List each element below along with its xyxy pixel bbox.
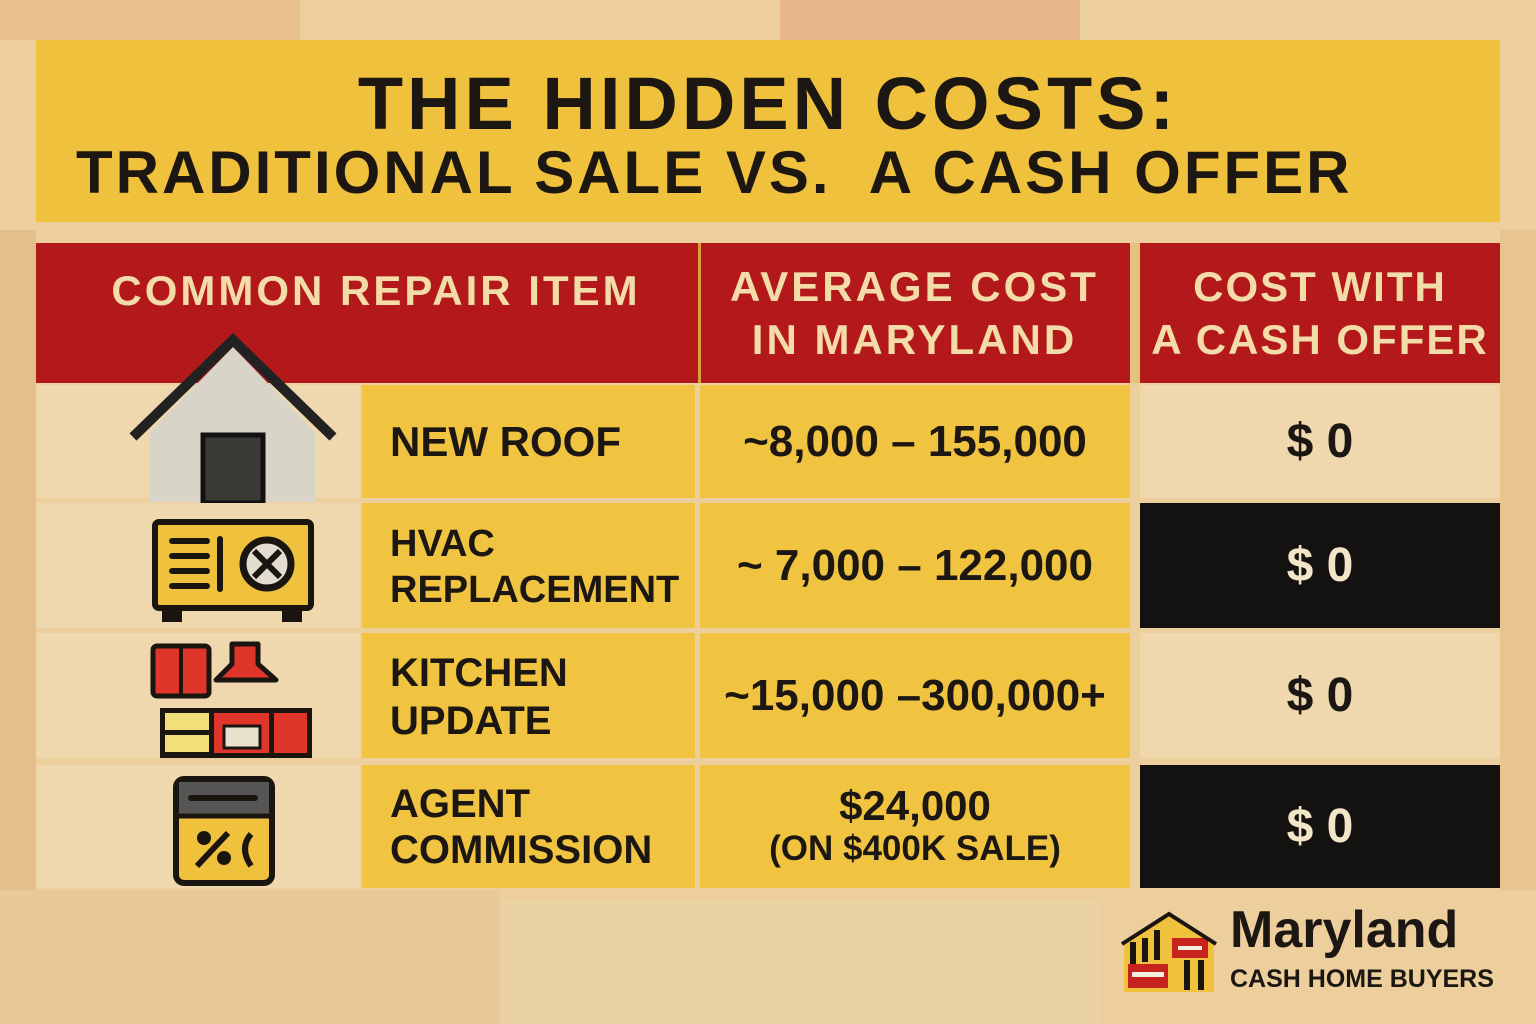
row: new roof: NEW ROOF bbox=[390, 418, 621, 464]
row: kitchen: KITCHEN bbox=[390, 651, 568, 695]
row: kitchen bbox=[36, 633, 1500, 758]
row: hvac: HVAC bbox=[390, 523, 495, 565]
row: kitchen: $ 0 bbox=[1287, 669, 1353, 722]
row: agent commission: COMMISSION bbox=[390, 828, 652, 872]
table header: COMMON REPAIR ITEM bbox=[111, 267, 641, 314]
row: agent commission: AGENT bbox=[390, 782, 530, 826]
row: new roof: ~8,000 – 155,000 bbox=[743, 416, 1087, 466]
row: hvac: $ 0 bbox=[1287, 539, 1353, 592]
title bbox=[36, 40, 1500, 222]
table header: AVERAGE COST bbox=[730, 263, 1099, 310]
row: kitchen: ~15,000 –300,000+ bbox=[724, 670, 1106, 720]
logo: CASH HOME BUYERS bbox=[1230, 965, 1494, 993]
row: agent commission: $ 0 bbox=[1287, 800, 1353, 853]
row: kitchen: UPDATE bbox=[390, 699, 551, 743]
row: agent commission bbox=[36, 765, 1500, 888]
title: THE HIDDEN COSTS: bbox=[358, 62, 1178, 145]
row: agent commission: (ON $400K SALE) bbox=[769, 829, 1061, 868]
icon: kitchen bbox=[150, 642, 312, 758]
table header: COST WITH bbox=[1193, 263, 1447, 310]
row: new roof: $ 0 bbox=[1287, 415, 1353, 468]
icon: house bbox=[130, 333, 336, 503]
row: hvac: ~ 7,000 – 122,000 bbox=[737, 540, 1093, 590]
row: agent commission: $24,000 bbox=[839, 782, 991, 829]
icon: maryland flag house bbox=[1121, 912, 1217, 992]
row: hvac: REPLACEMENT bbox=[390, 569, 679, 611]
row: hvac bbox=[36, 503, 1500, 628]
row: new roof bbox=[36, 385, 1500, 498]
logo bbox=[1121, 901, 1494, 993]
table header bbox=[36, 243, 1500, 383]
table header: A CASH OFFER bbox=[1151, 316, 1489, 363]
table header: IN MARYLAND bbox=[752, 316, 1077, 363]
title: TRADITIONAL SALE VS. A CASH OFFER bbox=[76, 139, 1352, 206]
logo: Maryland bbox=[1230, 901, 1458, 959]
icon: hvac unit bbox=[152, 519, 314, 622]
icon: calculator bbox=[173, 776, 275, 886]
